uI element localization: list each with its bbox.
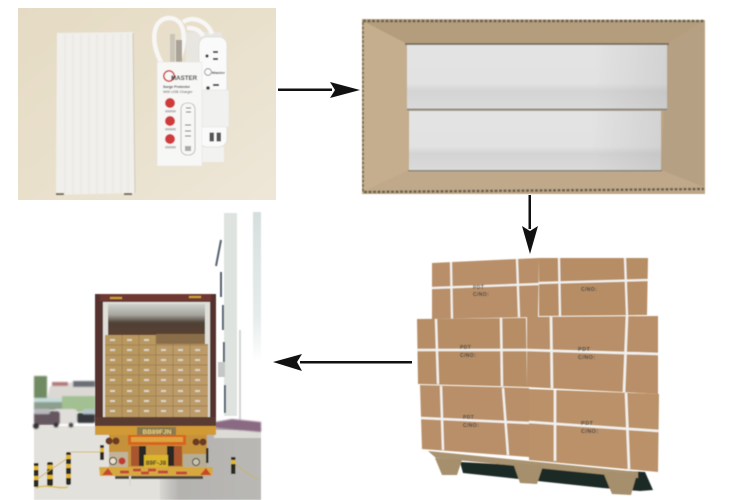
white box: lower xyxy=(409,111,661,170)
carton: middle right: PDT xyxy=(578,347,590,353)
product card xyxy=(157,62,202,166)
card subtitle: With USB Charger xyxy=(163,90,193,94)
truck trailer rear xyxy=(95,426,216,486)
carton bottom flap xyxy=(364,170,704,191)
carton: top left xyxy=(432,258,539,319)
carton: middle left xyxy=(417,318,527,387)
carton: bottom right xyxy=(529,389,659,472)
card feature badges xyxy=(165,98,175,144)
white box: upper xyxy=(407,45,667,109)
carton: bottom left: C/NO: xyxy=(463,423,479,429)
outlet holes xyxy=(205,51,219,90)
card strip outline xyxy=(181,103,195,155)
building at right xyxy=(215,212,261,432)
power cord loops xyxy=(154,18,212,64)
background trees and houses xyxy=(34,376,95,412)
carton: bottom left: PDT xyxy=(463,415,474,421)
plug xyxy=(170,34,175,62)
cargo cartons stack xyxy=(105,335,208,417)
rear bumper xyxy=(99,467,213,476)
ground xyxy=(34,428,261,500)
carton: bottom right: PDT xyxy=(581,421,593,427)
carton: top left: C/NO: xyxy=(473,292,489,298)
container interior xyxy=(103,302,210,417)
power strip body xyxy=(199,37,227,147)
card logo: MASTER xyxy=(171,75,198,82)
flower bed xyxy=(215,419,261,432)
card title: Surge Protector xyxy=(163,85,191,89)
truck trailer rear: BB89FJN xyxy=(143,429,172,436)
sleeve band xyxy=(202,90,229,127)
panel: open carton with boxes xyxy=(362,19,705,194)
carton: middle right xyxy=(527,316,658,394)
arrow: carton to pallet xyxy=(522,195,538,254)
USB ports xyxy=(210,132,221,142)
surge protector in packaging xyxy=(154,18,229,166)
carton: bottom left xyxy=(420,385,529,457)
card logo xyxy=(164,71,198,82)
strip brand mark xyxy=(205,69,225,75)
carton left flap xyxy=(363,21,409,191)
carton top flap xyxy=(363,21,704,44)
truck trailer rear: 89F-J8 xyxy=(146,460,167,467)
parked cars xyxy=(33,409,95,429)
strip brand mark: Master xyxy=(212,70,225,75)
shipping container xyxy=(95,294,216,427)
carton right flap xyxy=(661,21,704,187)
carton: top right xyxy=(539,258,648,316)
arrow: product to carton xyxy=(278,82,360,98)
panel: container loading photo xyxy=(33,212,261,500)
carton: top right: C/NO: xyxy=(581,287,597,293)
panel: palletized cartons xyxy=(417,258,659,495)
carton: middle left: C/NO: xyxy=(460,353,476,359)
panel: product photo xyxy=(18,8,276,200)
corrugated edges xyxy=(363,21,704,192)
pallet xyxy=(428,451,653,495)
plain white retail box xyxy=(56,32,135,195)
traffic bollards xyxy=(34,445,258,488)
license plate xyxy=(144,455,168,467)
arrow: pallet to container xyxy=(273,354,412,371)
carton: middle right: C/NO: xyxy=(578,355,596,361)
carton: middle left: PDT xyxy=(460,345,471,351)
carton: bottom right: C/NO: xyxy=(581,429,599,435)
carton: top left: PDT xyxy=(473,285,484,291)
